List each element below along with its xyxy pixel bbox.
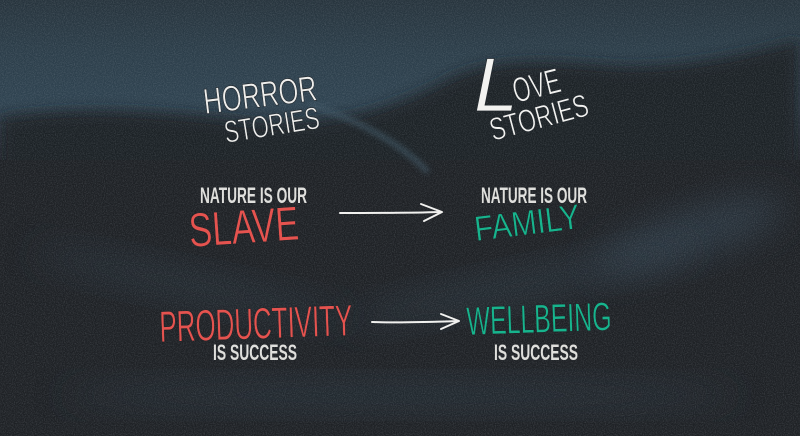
text: productivity is success: IS SUCCESS	[213, 340, 297, 365]
text: nature is our family: NATURE IS OUR	[481, 183, 587, 208]
heading: love stories: OVE	[509, 61, 565, 111]
text: nature is our slave	[187, 183, 307, 258]
heading: love stories: STORIES	[485, 87, 592, 148]
text: nature is our family: FAMILY	[472, 197, 582, 249]
text: productivity is success: PRODUCTIVITY	[159, 296, 353, 352]
text: nature is our slave: NATURE IS OUR	[200, 183, 307, 208]
arrow: productivity to wellbeing	[372, 314, 459, 329]
text: nature is our slave: SLAVE	[187, 197, 300, 258]
text: wellbeing is success: IS SUCCESS	[494, 340, 578, 365]
arrow: slave to family	[340, 204, 442, 221]
text: wellbeing is success: WELLBEING	[466, 295, 612, 344]
heading: horror stories: HORROR	[201, 67, 319, 122]
text: wellbeing is success	[466, 295, 612, 365]
heading: love stories	[474, 43, 592, 148]
heading: horror stories	[201, 67, 322, 150]
heading: love stories: L	[474, 43, 518, 128]
text: productivity is success	[159, 296, 353, 365]
heading: horror stories: STORIES	[222, 100, 322, 150]
